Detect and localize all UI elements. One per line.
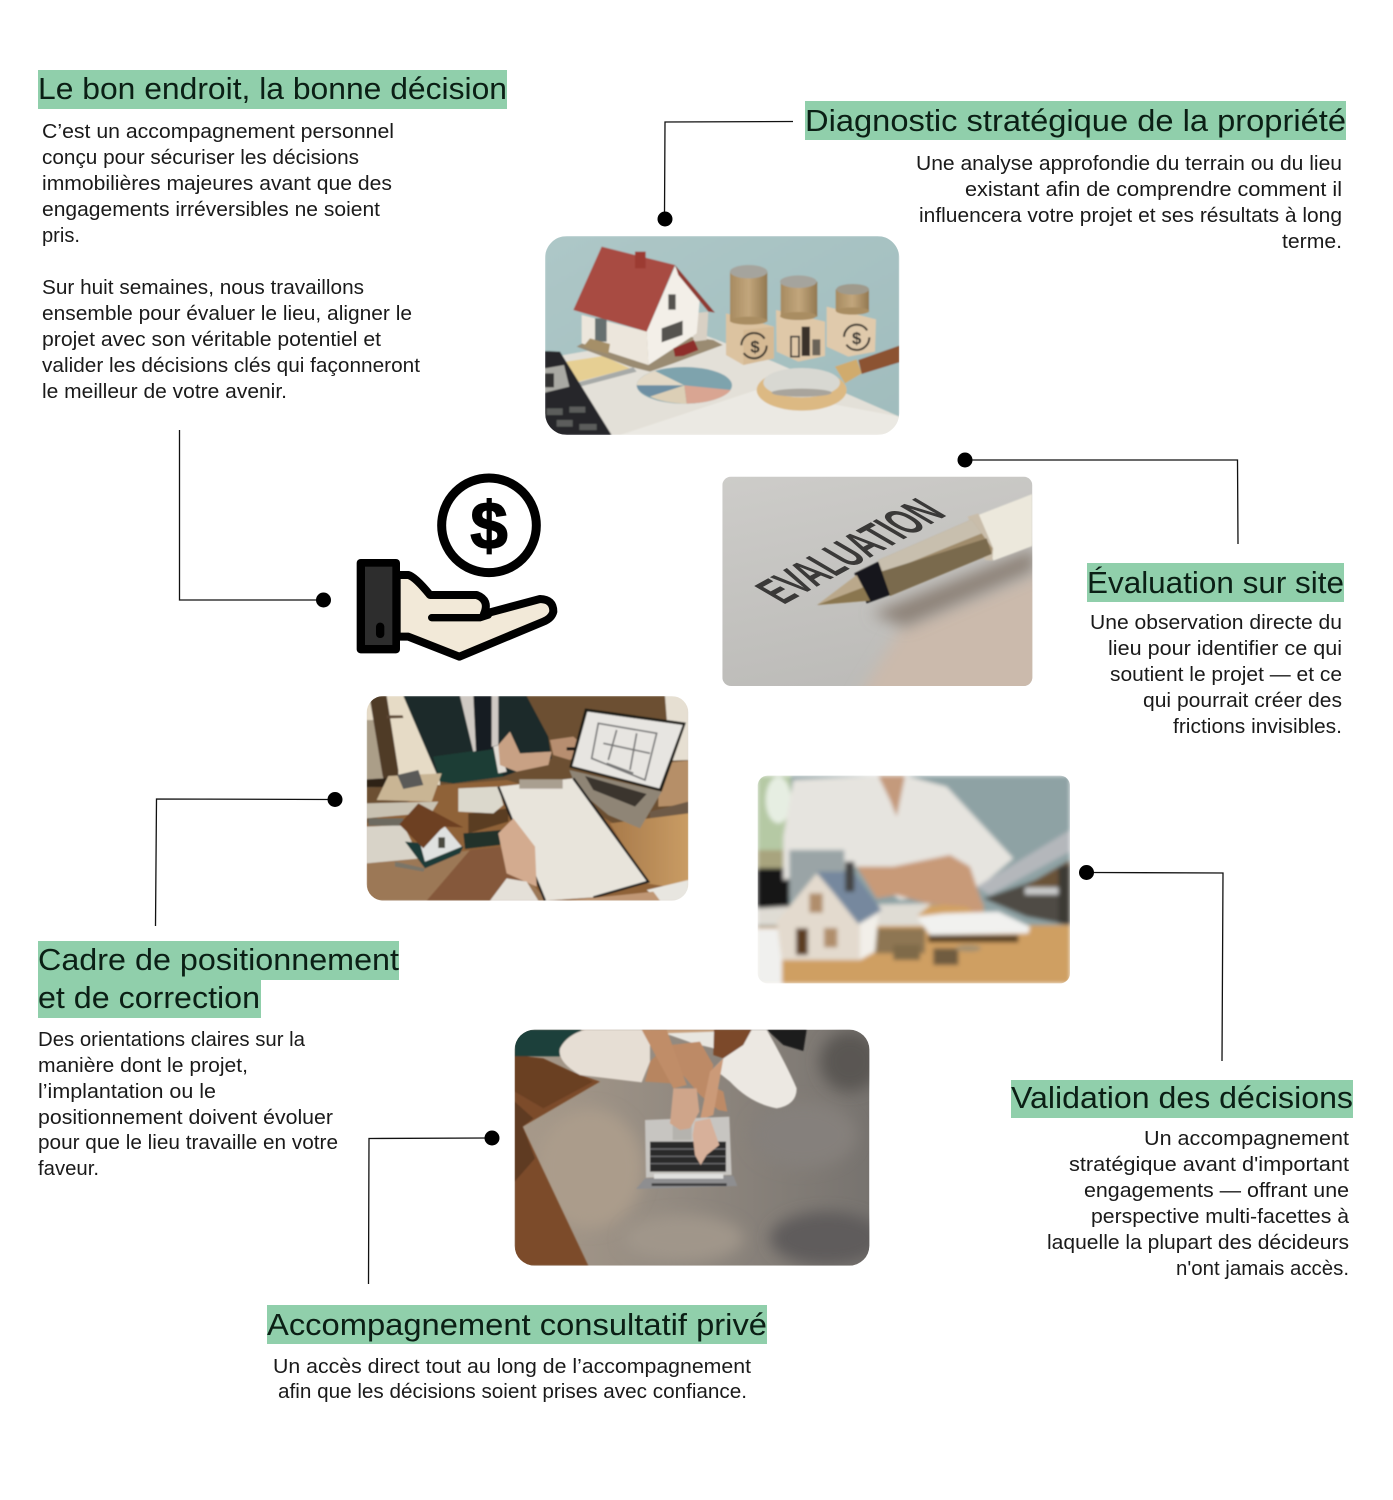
model house (405, 842, 463, 868)
icon: open hand (397, 575, 553, 657)
laptop (645, 1117, 732, 1178)
photo: consultation with laptop and model house (367, 696, 688, 901)
text block: diagnostic: terme. (1282, 231, 1342, 253)
text block: decision validation: stratégique avant d'important (1069, 1154, 1349, 1176)
text block: diagnostic: Une analyse approfondie du terrain ou du lieu (916, 153, 1342, 175)
heading: Cadre de positionnement et de correction: Cadre de positionnement (38, 942, 399, 977)
icon: dollar coin: $ (470, 490, 508, 564)
connector: photo to decision validation (1079, 865, 1223, 1061)
icon: cuff (357, 559, 400, 653)
text block: introduction: conçu pour sécuriser les décisions (42, 147, 359, 169)
text block: decision validation: n'ont jamais accès. (1176, 1258, 1349, 1280)
text block: introduction: projet avec son véritable potentiel et (42, 329, 381, 351)
connector: photo to site evaluation (958, 452, 1238, 544)
photo: pen on the word evaluation (722, 476, 1032, 686)
text block: introduction: ensemble pour évaluer le lieu, aligner le (42, 303, 412, 325)
heading: Le bon endroit, la bonne décision: Le bon endroit, la bonne décision (38, 71, 507, 106)
heading: Accompagnement consultatif privé: Accompagnement consultatif privé (267, 1307, 767, 1342)
text block: private advisory: Un accès direct tout au long de l’accompagnement (273, 1356, 751, 1378)
text block: decision validation: engagements — offrant une (1084, 1180, 1349, 1202)
photo: pen on the word evaluation: EVALUATION (743, 491, 958, 611)
text block: site evaluation: lieu pour identifier ce qui (1108, 638, 1342, 660)
text block: positioning: pour que le lieu travaille en votre (38, 1132, 338, 1154)
text block: positioning: Des orientations claires sur la (38, 1029, 306, 1051)
text block: decision validation: perspective multi-facettes à (1091, 1206, 1350, 1228)
text block: introduction: immobilières majeures avant que des (42, 173, 392, 195)
desk (367, 780, 688, 901)
text block: site evaluation: Une observation directe du (1090, 612, 1342, 634)
text block: introduction (42, 121, 420, 403)
text block: positioning: manière dont le projet, (38, 1055, 248, 1077)
text block: positioning: faveur. (38, 1158, 99, 1180)
text block: positioning: positionnement doivent évoluer (38, 1107, 333, 1129)
text block: positioning (38, 1029, 338, 1180)
text block: positioning: l’implantation ou le (38, 1081, 216, 1103)
connector: photo to positioning (156, 792, 342, 926)
books (377, 773, 442, 802)
photo: model house, coins and magnifying glass (545, 236, 899, 435)
heading: Cadre de positionnement et de correction (38, 941, 399, 1018)
text block: site evaluation (1090, 612, 1342, 738)
text block: introduction: engagements irréversibles ne soient (42, 199, 380, 221)
foreground hand (498, 818, 537, 887)
connector: introduction to icon (180, 430, 331, 608)
text block: introduction: valider les décisions clés qui façonneront (42, 355, 420, 377)
text block: site evaluation: soutient le projet — et ce (1110, 664, 1342, 686)
text block: introduction: Sur huit semaines, nous travaillons (42, 277, 364, 299)
heading: Diagnostic stratégique de la propriété: Diagnostic stratégique de la propriété (805, 103, 1346, 138)
text block: introduction: C’est un accompagnement personnel (42, 121, 394, 143)
text block: decision validation: laquelle la plupart des décideurs (1047, 1232, 1349, 1254)
heading: Validation des décisions: Validation des décisions (1011, 1080, 1353, 1115)
photo: model house, coins and magnifying glass: $ (852, 329, 862, 348)
connector: photo to private advisory (368, 1130, 500, 1284)
connector: diagnostic to photo (658, 122, 793, 226)
text block: decision validation: Un accompagnement (1144, 1128, 1349, 1150)
wood floor (515, 1052, 600, 1266)
text block: diagnostic: existant afin de comprendre comment il (965, 179, 1342, 201)
photo: model house, coins and magnifying glass: $ (750, 337, 760, 356)
text block: site evaluation: qui pourrait créer des (1143, 690, 1342, 712)
text block: private advisory: afin que les décisions soient prises avec confiance. (278, 1381, 747, 1403)
photo: person typing on a laptop on a rug (515, 1030, 883, 1266)
hands (670, 1088, 699, 1130)
legs (560, 1030, 650, 1082)
text block: private advisory (273, 1356, 751, 1403)
icon: hand holding dollar coin (357, 478, 553, 657)
text block: introduction: pris. (42, 225, 80, 247)
text block: introduction: le meilleur de votre avenir. (42, 381, 287, 403)
text block: site evaluation: frictions invisibles. (1173, 716, 1342, 738)
photo: hand on calculator with model house (758, 776, 1070, 983)
laptop (569, 770, 662, 828)
icon: dollar coin (442, 478, 536, 573)
text block: diagnostic (916, 153, 1342, 253)
text block: decision validation (1047, 1128, 1350, 1280)
text block: diagnostic: influencera votre projet et ses résultats à long (919, 205, 1342, 227)
suit (403, 696, 552, 783)
heading: Évaluation sur site: Évaluation sur site (1087, 565, 1344, 600)
heading: Cadre de positionnement et de correction: et de correction (38, 980, 260, 1015)
clipboard (498, 778, 648, 901)
